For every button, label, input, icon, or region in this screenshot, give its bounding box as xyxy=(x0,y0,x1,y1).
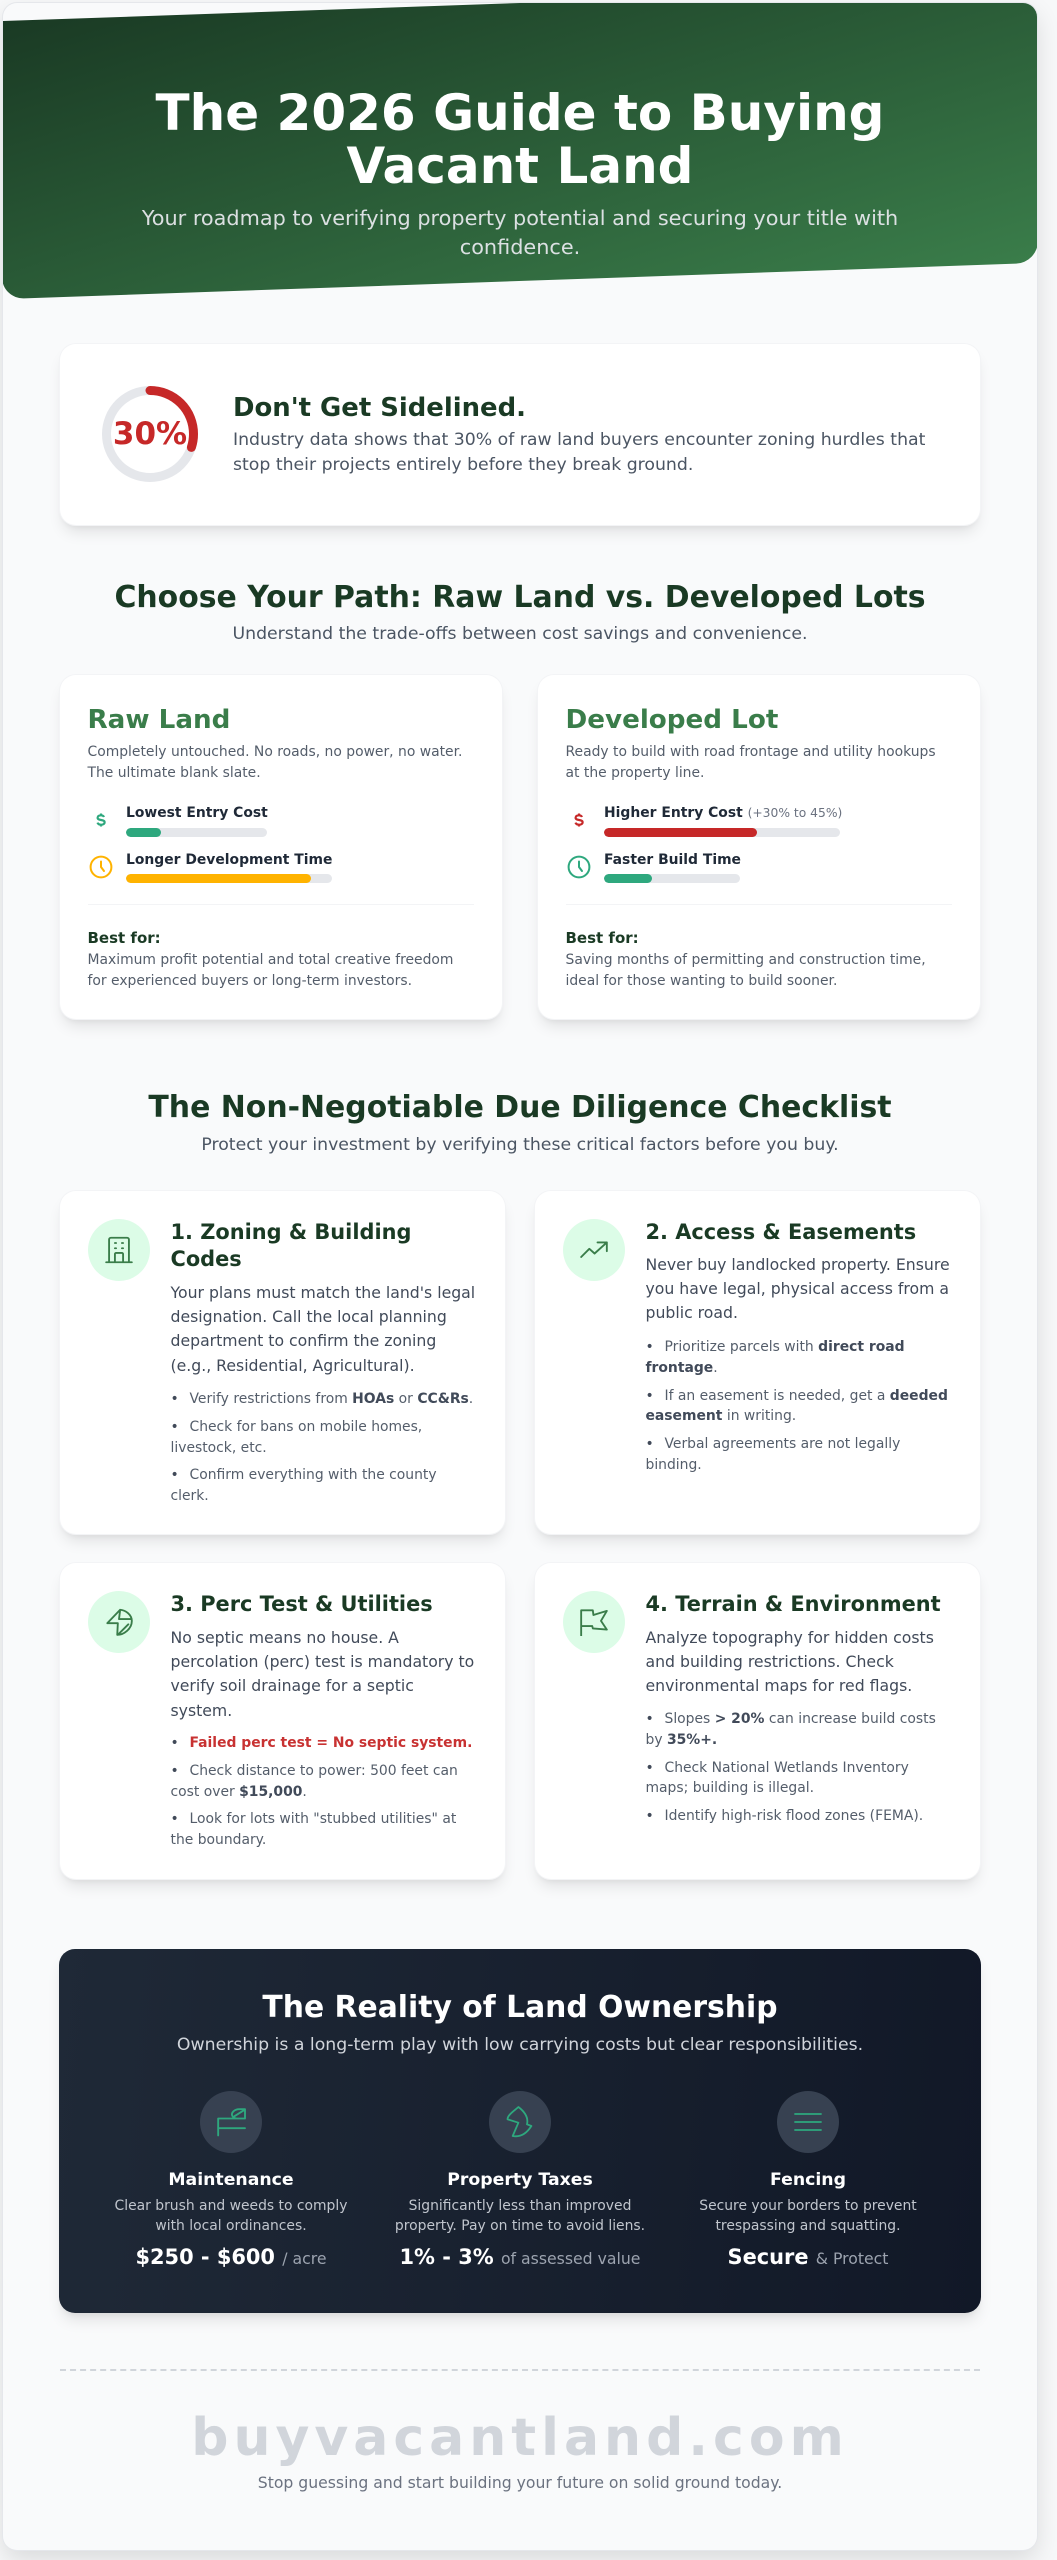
icon: dollar xyxy=(96,814,106,826)
property taxes text: Property Taxes xyxy=(447,2170,593,2190)
footer brand: buyvacantland.com xyxy=(191,2408,849,2468)
card bullets xyxy=(170,1735,472,1848)
card paragraph: Never buy landlocked property. Ensure xyxy=(646,1255,950,1274)
property taxes text xyxy=(395,2170,645,2269)
stat body: stop their projects entirely before they break ground. xyxy=(233,455,693,475)
card paragraph: designation. Call the local planning xyxy=(170,1307,447,1326)
header subtitle: confidence. xyxy=(460,235,580,259)
bar: higher entry cost xyxy=(604,828,840,837)
icon: maintenance xyxy=(200,2091,262,2153)
label: lowest entry cost: Lowest Entry Cost xyxy=(126,805,268,821)
developed lot description: Ready to build with road frontage and utility hookups xyxy=(566,744,936,760)
card bullets: clerk. xyxy=(170,1488,209,1504)
icon: clock xyxy=(90,856,112,878)
title: The 2026 Guide to Buying xyxy=(156,84,884,142)
card bullets: • xyxy=(646,1760,654,1776)
panel: terrain and environment xyxy=(535,1563,980,1879)
heading: checklist: The Non-Negotiable Due Diligence Checklist xyxy=(148,1090,892,1125)
card bullets: Verbal agreements are not legally xyxy=(664,1436,900,1452)
label: higher entry cost: Higher Entry Cost (+30% to 45%) xyxy=(604,805,842,821)
card bullets xyxy=(646,1339,948,1473)
header banner xyxy=(2,0,1038,299)
maintenance text: Clear brush and weeds to comply xyxy=(115,2198,347,2214)
card bullets: Check distance to power: 500 feet can xyxy=(190,1763,458,1779)
card bullets: the boundary. xyxy=(170,1832,266,1848)
card bullets: easement in writing. xyxy=(646,1408,796,1424)
card bullets: If an easement is needed, get a deeded xyxy=(664,1388,948,1404)
card bullets: Check for bans on mobile homes, xyxy=(190,1419,422,1435)
card bullets: cost over $15,000. xyxy=(170,1784,307,1800)
stat body xyxy=(233,430,925,475)
card paragraph: system. xyxy=(170,1701,232,1720)
maintenance text: with local ordinances. xyxy=(155,2218,307,2234)
label: longer development time: Longer Development Time xyxy=(126,852,332,868)
header subtitle xyxy=(142,206,898,259)
card paragraph: Analyze topography for hidden costs xyxy=(646,1628,934,1647)
best for text xyxy=(566,952,926,989)
best for text: Saving months of permitting and construction time, xyxy=(566,952,926,968)
card bullets: • xyxy=(646,1436,654,1452)
card bullets: • xyxy=(646,1808,654,1824)
developed lot heading: Developed Lot xyxy=(566,705,778,735)
card bullets: • xyxy=(646,1711,654,1727)
stat heading: Don't Get Sidelined. xyxy=(233,393,526,423)
card paragraph xyxy=(646,1628,934,1695)
best for heading: Best for: xyxy=(88,929,161,947)
maintenance text xyxy=(115,2170,347,2269)
subheading: checklist: Protect your investment by verifying these critical factors before you buy. xyxy=(201,1135,839,1155)
icon: fencing xyxy=(777,2091,839,2153)
raw land description: Completely untouched. No roads, no power, no water. xyxy=(88,744,462,760)
donut chart: 30% xyxy=(102,386,198,482)
best for heading: Best for: xyxy=(566,929,639,947)
icon: clock xyxy=(568,856,590,878)
fencing text: trespassing and squatting. xyxy=(715,2218,901,2234)
card bullets: • xyxy=(170,1419,179,1435)
card paragraph: No septic means no house. A xyxy=(170,1628,399,1647)
card bullets: Verify restrictions from HOAs or CC&Rs. xyxy=(190,1391,473,1407)
card paragraph: Your plans must match the land's legal xyxy=(170,1283,475,1302)
card bullets: Slopes > 20% can increase build costs xyxy=(664,1711,936,1727)
card heading: Codes xyxy=(170,1247,242,1271)
card bullets: Failed perc test = No septic system. xyxy=(190,1735,472,1751)
card bullets: • xyxy=(646,1388,654,1404)
property taxes text: property. Pay on time to avoid liens. xyxy=(395,2218,645,2234)
card heading: 2. Access & Easements xyxy=(646,1220,916,1244)
card paragraph: (e.g., Residential, Agricultural). xyxy=(170,1356,415,1375)
maintenance text: $250 - $600 / acre xyxy=(135,2245,327,2269)
card bullets: • xyxy=(170,1391,179,1407)
icon: building xyxy=(88,1219,150,1281)
panel: reality of land ownership xyxy=(59,1949,981,2313)
raw land description xyxy=(87,744,462,781)
title xyxy=(156,84,884,195)
developed lot description: at the property line. xyxy=(566,765,704,781)
card heading: 3. Perc Test & Utilities xyxy=(170,1592,433,1616)
icon: bolt xyxy=(88,1591,150,1653)
panel: stat callout xyxy=(60,344,980,525)
panel: perc test and utilities xyxy=(60,1563,505,1879)
fencing text xyxy=(699,2170,917,2269)
header subtitle: Your roadmap to verifying property potential and securing your title with xyxy=(142,206,898,230)
best for text xyxy=(88,952,453,989)
card bullets: • xyxy=(646,1339,654,1355)
card bullets: • xyxy=(170,1735,179,1751)
card paragraph: public road. xyxy=(646,1303,738,1322)
footer tagline: Stop guessing and start building your future on solid ground today. xyxy=(258,2473,782,2492)
best for text: for experienced buyers or long-term investors. xyxy=(88,973,412,989)
card paragraph xyxy=(170,1628,474,1720)
raw land description: The ultimate blank slate. xyxy=(88,765,261,781)
fencing text: Fencing xyxy=(770,2170,846,2190)
card bullets xyxy=(646,1711,936,1824)
panel: raw land xyxy=(60,675,502,1019)
dark panel heading: The Reality of Land Ownership xyxy=(262,1990,778,2025)
bar: lowest entry cost xyxy=(126,828,267,837)
card paragraph: verify soil drainage for a septic xyxy=(170,1676,414,1695)
card bullets: Look for lots with "stubbed utilities" at xyxy=(190,1811,456,1827)
card paragraph: department to confirm the zoning xyxy=(170,1331,436,1350)
subheading: trade-offs: Understand the trade-offs between cost savings and convenience. xyxy=(232,624,808,644)
icon: property taxes xyxy=(489,2091,551,2153)
panel: developed lot xyxy=(538,675,980,1019)
panel: zoning and building codes xyxy=(60,1191,505,1534)
card bullets: • xyxy=(170,1467,179,1483)
card heading: 4. Terrain & Environment xyxy=(646,1592,941,1616)
best for text: ideal for those wanting to build sooner. xyxy=(566,973,837,989)
card bullets: Check National Wetlands Inventory xyxy=(664,1760,909,1776)
card paragraph: percolation (perc) test is mandatory to xyxy=(170,1652,474,1671)
card bullets: livestock, etc. xyxy=(170,1440,267,1456)
card paragraph: you have legal, physical access from a xyxy=(646,1279,949,1298)
title: Vacant Land xyxy=(346,137,693,195)
card bullets: by 35%+. xyxy=(646,1732,717,1748)
panel: access and easements xyxy=(535,1191,980,1534)
card bullets: Prioritize parcels with direct road xyxy=(664,1339,905,1355)
bar: development time xyxy=(126,874,332,883)
card paragraph: and building restrictions. Check xyxy=(646,1652,894,1671)
bar: build time xyxy=(604,874,740,883)
card bullets: frontage. xyxy=(646,1360,718,1376)
icon: dollar xyxy=(574,814,584,826)
stat body: Industry data shows that 30% of raw land buyers encounter zoning hurdles that xyxy=(233,430,925,450)
label: faster build time: Faster Build Time xyxy=(604,852,741,868)
card paragraph xyxy=(646,1255,950,1322)
card bullets: maps; building is illegal. xyxy=(646,1780,814,1796)
dark panel subheading: Ownership is a long-term play with low carrying costs but clear responsibilities. xyxy=(177,2035,863,2055)
fencing text: Secure your borders to prevent xyxy=(699,2198,917,2214)
property taxes text: 1% - 3% of assessed value xyxy=(400,2245,640,2269)
raw land heading: Raw Land xyxy=(88,705,230,735)
card bullets: • xyxy=(170,1811,179,1827)
developed lot description xyxy=(566,744,936,781)
card paragraph xyxy=(170,1283,475,1375)
fencing text: Secure & Protect xyxy=(728,2245,888,2269)
stat number: 30% xyxy=(113,416,187,452)
icon: flag xyxy=(563,1591,625,1653)
best for text: Maximum profit potential and total creative freedom xyxy=(88,952,453,968)
card paragraph: environmental maps for red flags. xyxy=(646,1676,912,1695)
card bullets: • xyxy=(170,1763,179,1779)
maintenance text: Maintenance xyxy=(168,2170,294,2190)
card bullets: Identify high-risk flood zones (FEMA). xyxy=(664,1808,923,1824)
card heading: 1. Zoning & Building xyxy=(170,1220,411,1244)
property taxes text: Significantly less than improved xyxy=(409,2198,631,2214)
icon: trending up xyxy=(563,1219,625,1281)
card heading xyxy=(170,1220,411,1271)
card bullets: Confirm everything with the county xyxy=(190,1467,437,1483)
heading: choose your path: Choose Your Path: Raw Land vs. Developed Lots xyxy=(114,580,926,615)
card bullets xyxy=(170,1391,473,1504)
card bullets: binding. xyxy=(646,1457,702,1473)
